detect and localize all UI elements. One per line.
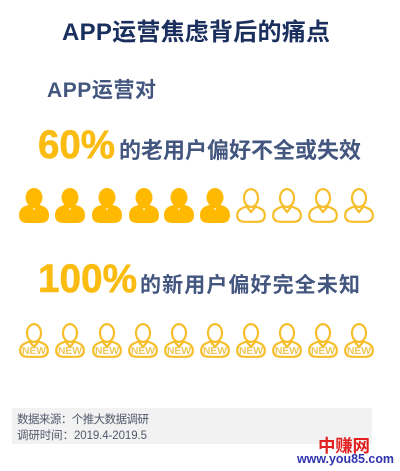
icon: solid user 6	[200, 188, 230, 223]
icon: new user 2	[56, 324, 84, 357]
stat: 100% new users	[38, 257, 360, 301]
icon: new user 3: NEW	[95, 346, 120, 357]
icon: new user 4	[129, 324, 157, 357]
icon: new user 10	[345, 324, 373, 357]
subtitle: APP运营对	[47, 79, 156, 102]
icon: new user 9	[309, 324, 337, 357]
stat description: old users: 的老用户偏好不全或失效	[119, 138, 361, 163]
icon: new user 3	[93, 324, 121, 357]
icon: new user 4: NEW	[131, 346, 156, 357]
icon: new user 6: NEW	[203, 346, 228, 357]
stat number: 60%: 60%	[38, 123, 115, 167]
icon: new user 1	[20, 324, 48, 357]
icon row: 10 new users	[20, 324, 373, 357]
icon: outline user 9	[309, 189, 337, 222]
icon: new user 6	[201, 324, 229, 357]
watermark url: www.you85.com	[296, 452, 394, 466]
stat number: 100%: 100%	[38, 257, 137, 301]
stat description: new users: 的新用户偏好完全未知	[140, 273, 360, 297]
stat: 60% old users	[38, 123, 361, 167]
icon: outline user 7	[237, 189, 265, 222]
icon: solid user 4	[129, 188, 159, 223]
survey period line: 调研时间：2019.4-2019.5	[17, 429, 147, 442]
icon row: 6 of 10 solid old users	[19, 188, 373, 223]
icon: new user 7	[237, 324, 265, 357]
icon: solid user 5	[164, 188, 194, 223]
icon: solid user 1	[19, 188, 49, 223]
icon: new user 8	[273, 324, 301, 357]
icon: solid user 2	[55, 188, 85, 223]
watermark name: 中赚网	[318, 436, 370, 456]
icon: outline user 8	[273, 189, 301, 222]
icon: new user 1: NEW	[22, 346, 47, 357]
icon: new user 8: NEW	[275, 346, 300, 357]
icon: solid user 3	[92, 188, 122, 223]
watermark	[296, 436, 394, 466]
source line: 数据来源：个推大数据调研	[17, 412, 150, 426]
icon: new user 9: NEW	[311, 346, 336, 357]
icon: new user 5: NEW	[167, 346, 192, 357]
icon: new user 5	[165, 324, 193, 357]
icon: outline user 10	[345, 189, 373, 222]
icon: new user 7: NEW	[239, 346, 264, 357]
title: APP运营焦虑背后的痛点	[62, 19, 330, 46]
panel: data source footer	[12, 408, 372, 444]
icon: new user 10: NEW	[347, 346, 372, 357]
icon: new user 2: NEW	[58, 346, 83, 357]
